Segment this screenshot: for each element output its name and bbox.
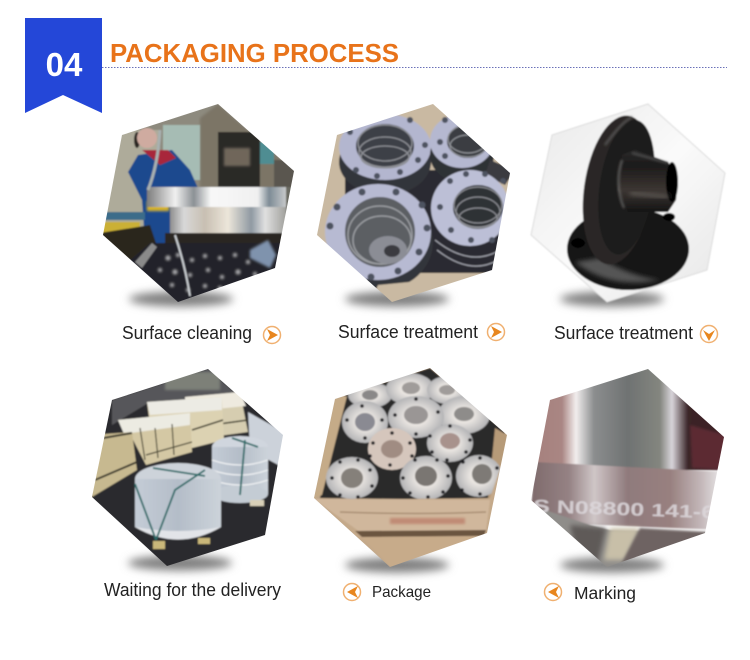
photo shadow	[345, 292, 449, 306]
icon: down arrow	[700, 326, 718, 342]
photo: stamped metal flange close-up: S N08800 141-6	[533, 496, 715, 522]
heading: packaging process: PACKAGING PROCESS	[110, 40, 399, 68]
panel: waiting for the delivery	[88, 365, 288, 600]
photo: stacked flanges in box	[310, 100, 515, 305]
photo shadow	[128, 556, 232, 570]
photo shadow	[129, 292, 233, 306]
caption: package: Package	[372, 584, 431, 601]
caption: marking: Marking	[574, 583, 636, 603]
panel: surface cleaning	[100, 100, 300, 344]
caption: surface treatment: Surface treatment	[554, 323, 693, 343]
dotted rule	[102, 66, 727, 68]
caption: surface cleaning: Surface cleaning	[122, 323, 252, 343]
caption: waiting for the delivery: Waiting for the delivery	[104, 580, 281, 600]
panel: surface treatment stacked flanges	[310, 100, 515, 342]
panel: surface treatment black flange	[531, 104, 725, 343]
photo: worker washing flange	[100, 100, 300, 305]
icon: left arrow	[344, 584, 360, 600]
panel: package	[310, 365, 510, 601]
icon: right arrow	[264, 326, 280, 344]
photo shadow	[560, 292, 664, 306]
panel: marking	[528, 365, 728, 603]
photo: stamped metal flange close-up	[528, 365, 728, 570]
section number ribbon	[25, 18, 102, 113]
photo: flanges in wooden crate	[310, 365, 510, 570]
icon: right arrow	[488, 324, 504, 340]
section number ribbon: 04	[46, 46, 83, 83]
icon: left arrow	[544, 584, 562, 600]
caption: surface treatment: Surface treatment	[338, 322, 478, 342]
photo: black coated flange	[531, 104, 725, 302]
photo shadow	[560, 558, 664, 572]
photo: wrapped bundles and crates	[88, 365, 288, 570]
photo shadow	[345, 558, 449, 572]
